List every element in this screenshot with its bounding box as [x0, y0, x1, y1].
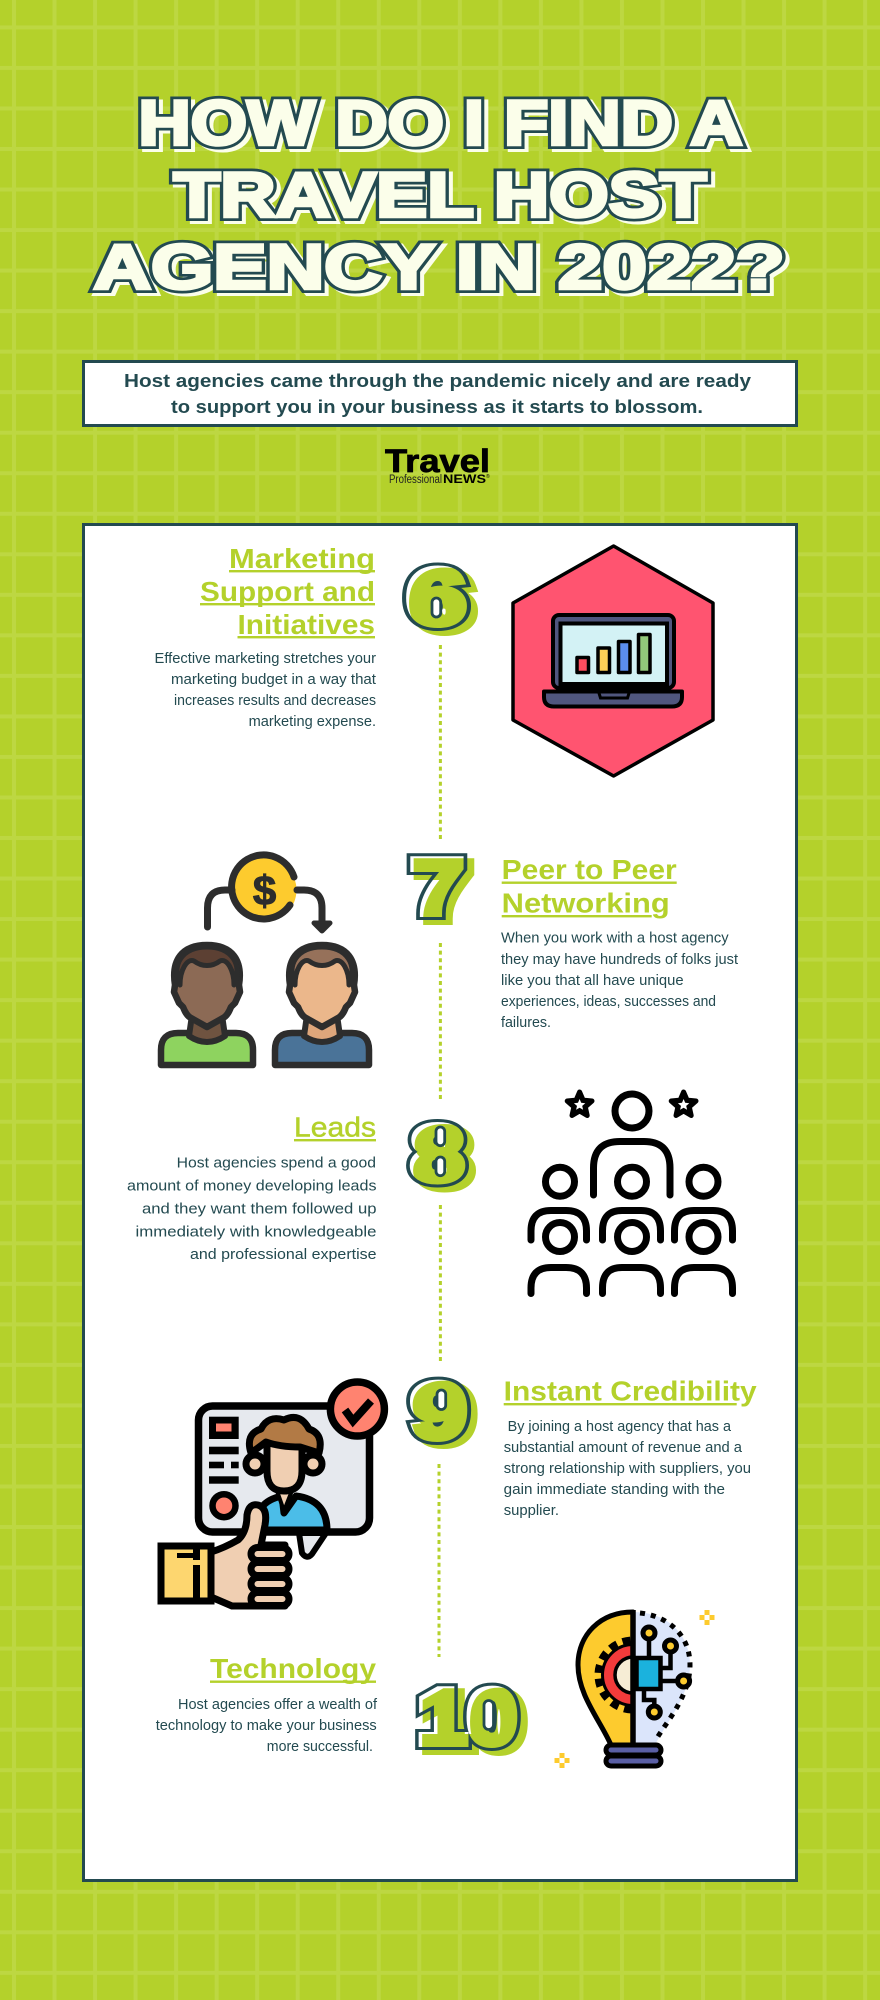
body text: technology: Host agencies offer a wealth of	[178, 1696, 378, 1713]
body text: peer to peer: experiences, ideas, successes and	[501, 993, 716, 1010]
intro text box: Host agencies came through the pandemic nicely and are ready	[124, 370, 752, 391]
icon: light bulb with gear and circuit	[578, 1610, 690, 1766]
icon: left person	[161, 945, 253, 1065]
logo: Travel Professional News: ®	[486, 473, 490, 480]
body text: marketing: marketing expense.	[249, 713, 376, 730]
heading: leads: Leads	[294, 1112, 376, 1143]
icon: laptop in hexagon	[513, 546, 713, 776]
heading: marketing support and initiatives	[200, 543, 375, 640]
body text: instant credibility: strong relationship with suppliers, you	[504, 1460, 751, 1477]
title: TRAVEL HOST	[178, 164, 710, 234]
heading: marketing support and initiatives: Marketing	[229, 543, 375, 574]
title: AGENCY IN 2022?	[98, 236, 788, 306]
body text: instant credibility: substantial amount of revenue and a	[504, 1439, 743, 1456]
body text: leads: and professional expertise	[190, 1246, 376, 1263]
number 10	[415, 1682, 528, 1756]
title: HOW DO I FIND A	[138, 88, 743, 158]
heading: technology: Technology	[210, 1653, 376, 1684]
body text: leads: immediately with knowledgeable	[136, 1224, 376, 1240]
body text: technology: more successful.	[267, 1738, 373, 1755]
heading: marketing support and initiatives: Initiatives	[238, 609, 375, 640]
body text: marketing: Effective marketing stretches your	[154, 650, 376, 667]
title: TRAVEL HOST	[174, 160, 706, 230]
number 6: 6	[414, 558, 473, 646]
section 10: technology	[156, 1610, 714, 1768]
logo: Travel Professional News: NEWS	[443, 474, 486, 486]
section 7: peer to peer	[161, 835, 739, 1065]
icon: dollar coin and arrows: $	[253, 867, 276, 914]
title: HOW DO I FIND A	[138, 88, 743, 158]
number 6	[402, 562, 478, 636]
heading: instant credibility: Instant Credibility	[504, 1376, 757, 1407]
panel: main white panel	[84, 524, 796, 1880]
heading: peer to peer networking	[502, 854, 677, 919]
number 10: 10	[424, 1678, 524, 1766]
logo: Travel Professional News: Travel	[385, 443, 490, 479]
icon: group of people with stars	[531, 1092, 732, 1294]
heading: peer to peer networking: Peer to Peer	[502, 854, 677, 885]
icon: left star	[567, 1092, 592, 1116]
number 9	[405, 1376, 478, 1449]
body text: technology: technology to make your business	[156, 1717, 377, 1734]
icon: right star	[671, 1092, 696, 1116]
number 8: 8	[418, 1114, 471, 1202]
section 6: marketing	[154, 543, 713, 776]
logo: Travel Professional News: Professional	[389, 474, 442, 486]
icon: sparkle top right	[700, 1610, 714, 1625]
number 9: 9	[418, 1370, 473, 1458]
body text: technology	[156, 1696, 378, 1755]
intro text box	[84, 362, 796, 426]
icon: sparkle bottom left	[554, 1753, 570, 1768]
body text: peer to peer: When you work with a host agency	[501, 930, 729, 947]
body text: leads: amount of money developing leads	[127, 1178, 376, 1194]
heading: peer to peer networking: Networking	[502, 888, 670, 919]
number 7	[406, 853, 474, 925]
icon: dollar coin and arrows	[208, 855, 330, 931]
body text: leads	[127, 1155, 376, 1263]
body text: leads: and they want them followed up	[142, 1200, 376, 1218]
body text: peer to peer: failures.	[501, 1014, 551, 1031]
title: AGENCY IN 2022?	[94, 232, 784, 302]
number 7: 7	[418, 848, 470, 936]
body text: leads: Host agencies spend a good	[177, 1155, 376, 1172]
section 9: instant credibility	[161, 1360, 757, 1606]
title: HOW DO I FIND A	[142, 92, 747, 162]
intro text box: to support you in your business as it starts to blossom.	[171, 396, 703, 417]
title: AGENCY IN 2022?	[94, 232, 784, 302]
body text: instant credibility	[504, 1418, 751, 1519]
section 8: leads	[127, 1092, 732, 1294]
body text: instant credibility: gain immediate standing with the	[504, 1481, 725, 1498]
icon: right person	[275, 945, 369, 1065]
title	[94, 88, 788, 306]
body text: peer to peer	[501, 930, 739, 1031]
icon: thumbs up profile card	[161, 1382, 384, 1606]
body text: marketing	[154, 650, 377, 730]
body text: instant credibility: By joining a host agency that has a	[508, 1418, 732, 1435]
body text: marketing: increases results and decreases	[174, 692, 376, 709]
body text: instant credibility: supplier.	[504, 1502, 559, 1519]
body text: peer to peer: they may have hundreds of folks just	[501, 951, 739, 968]
heading: marketing support and initiatives: Support and	[200, 576, 375, 607]
number 8	[406, 1119, 476, 1192]
title: TRAVEL HOST	[174, 160, 706, 230]
body text: peer to peer: like you that all have unique	[501, 972, 684, 989]
body text: marketing: marketing budget in a way that	[171, 671, 377, 688]
icon: two people exchanging money	[161, 855, 369, 1065]
